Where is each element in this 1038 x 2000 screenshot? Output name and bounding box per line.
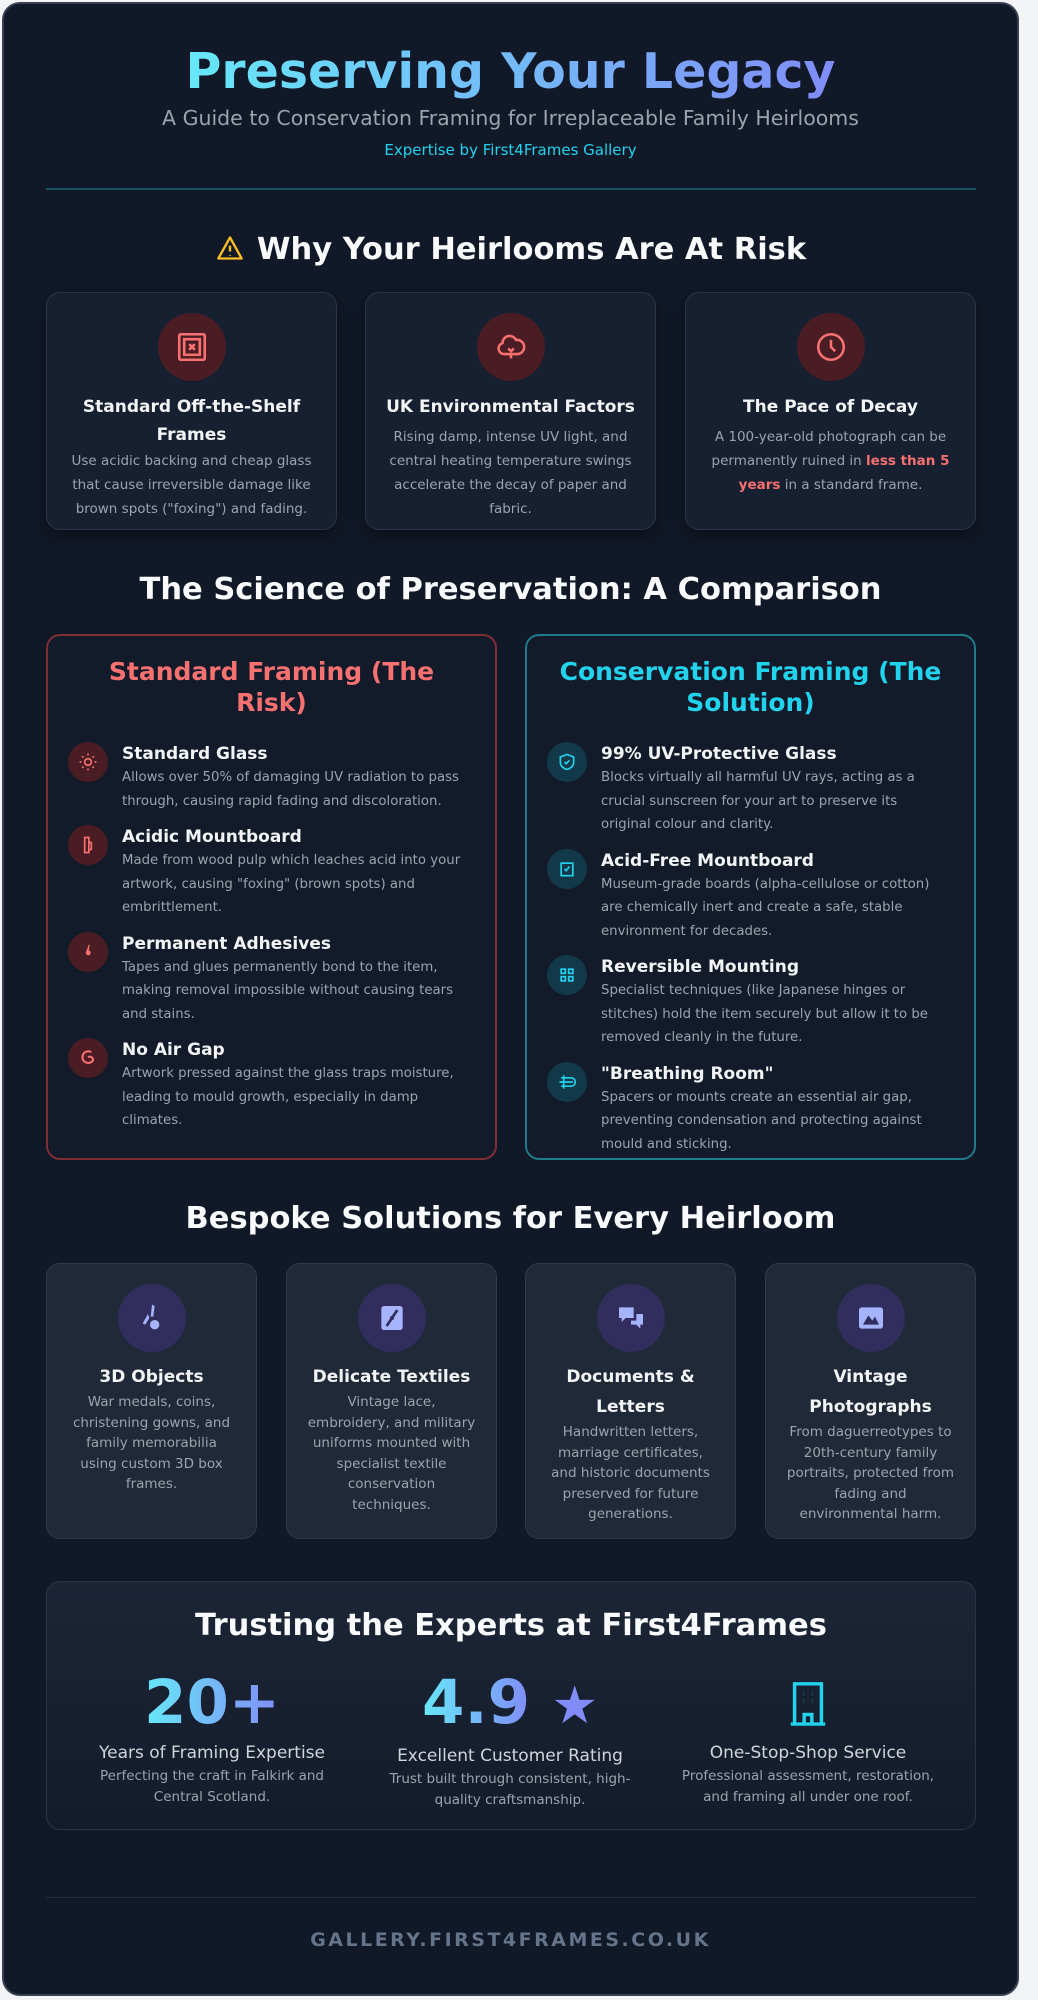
- card: textiles: Delicate Textiles: [313, 1367, 470, 1387]
- title: Preserving Your Legacy: [186, 43, 835, 100]
- item: no air gap: No Air Gap: [122, 1040, 225, 1060]
- item: acidic mountboard: [68, 825, 460, 915]
- panel: trusting the experts: [46, 1581, 976, 1830]
- stat: one-stop-shop: [682, 1682, 934, 1805]
- item: reversible: [547, 955, 928, 1045]
- stat: rating: Excellent Customer Rating: [397, 1746, 623, 1766]
- stat: rating: quality craftsmanship.: [435, 1792, 585, 1808]
- card: photographs: Vintage Photographs: [809, 1367, 932, 1417]
- card: textiles: Vintage lace,: [347, 1394, 436, 1410]
- heading: science: The Science of Preservation: A Comparison: [140, 572, 881, 607]
- item: UV glass: 99% UV-Protective Glass: [601, 744, 837, 764]
- icon: building: [790, 1682, 826, 1726]
- card: pace of decay: A 100-year-old photograph can be permanently ruined in less than 5 years in a standard frame.: [712, 429, 949, 493]
- panel: standard framing: Standard Framing (The: [109, 657, 434, 686]
- icon: frame: [158, 313, 226, 381]
- item: breathing room: [547, 1062, 922, 1152]
- stat: one-stop-shop: Professional assessment, restoration, and framing all under one roof.: [682, 1768, 934, 1805]
- stat: years: 20+: [144, 1667, 280, 1738]
- panel: standard framing: [46, 634, 497, 1160]
- item: breathing room: "Breathing Room": [601, 1064, 773, 1084]
- card: documents: Documents & Letters: [566, 1367, 695, 1417]
- icon: clock: [796, 313, 864, 381]
- item: acid-free: Acid-Free Mountboard: [601, 850, 814, 870]
- item: no air gap: Artwork pressed against the glass traps moisture, leading to mould growth, especially in damp climates.: [122, 1066, 454, 1128]
- card: documents: Handwritten letters, marriage certificates, and historic documents preserved for future generations.: [551, 1424, 710, 1522]
- heading: why at risk: Why Your Heirlooms Are At Risk: [257, 232, 806, 267]
- card: pace of decay: The Pace of Decay: [743, 397, 918, 417]
- expertise line: Expertise by First4Frames Gallery: [384, 141, 637, 159]
- card: textiles: [286, 1263, 497, 1539]
- card: off-the-shelf frames: [46, 292, 337, 530]
- card: photographs: From daguerreotypes to 20th-century family portraits, protected from fading and environmental harm.: [787, 1424, 954, 1522]
- panel: conservation framing: Conservation Framing (The: [560, 657, 941, 686]
- card: UK environment: [365, 292, 656, 530]
- card: pace of decay: [685, 292, 976, 530]
- stat: years: Years of Framing Expertise: [99, 1743, 325, 1763]
- item: reversible: Specialist techniques (like Japanese hinges or stitches) hold the item securely but allow it to be removed cleanly in the future.: [601, 983, 928, 1045]
- stat: rating: Trust built through consistent, high-: [390, 1771, 630, 1787]
- item: acidic mountboard: Made from wood pulp which leaches acid into your artwork, causing "foxing" (brown spots) and embrittlement.: [122, 853, 460, 915]
- stat: rating: [389, 1667, 630, 1808]
- item: adhesives: Tapes and glues permanently bond to the item, making removal impossible without causing tears and stains.: [122, 960, 453, 1022]
- card: 3D objects: War medals, coins, christening gowns, and family memorabilia using custom 3D box frames.: [73, 1394, 230, 1492]
- item: acidic mountboard: Acidic Mountboard: [122, 827, 302, 847]
- item: no air gap: [68, 1038, 454, 1128]
- card: 3D objects: [46, 1263, 257, 1539]
- icon: cloud: [476, 313, 544, 381]
- card: off-the-shelf frames: Use acidic backing and cheap glass that cause irreversible damage like brown spots ("foxing") and fading.: [71, 453, 312, 517]
- stat: years: Perfecting the craft in Falkirk and Central Scotland.: [100, 1768, 324, 1805]
- item: adhesives: Permanent Adhesives: [122, 934, 331, 954]
- card: textiles: embroidery, and military uniforms mounted with specialist textile conservation techniques.: [308, 1414, 475, 1512]
- item: acid-free: [547, 849, 929, 938]
- stat: years: [99, 1667, 325, 1805]
- card: off-the-shelf frames: Standard Off-the-Shelf Frames: [83, 397, 300, 445]
- footer url: GALLERY.FIRST4FRAMES.CO.UK: [310, 1929, 711, 1951]
- item: reversible: Reversible Mounting: [601, 957, 799, 977]
- panel: conservation framing: [525, 634, 976, 1160]
- item: adhesives: [68, 932, 453, 1022]
- item: UV glass: [547, 742, 915, 832]
- risk cards: [46, 292, 976, 534]
- panel: conservation framing: Solution): [686, 688, 815, 717]
- icon: picture: [836, 1284, 904, 1352]
- subtitle: A Guide to Conservation Framing for Irreplaceable Family Heirlooms: [162, 106, 859, 130]
- card: documents: [525, 1263, 736, 1539]
- card: UK environment: UK Environmental Factors: [386, 397, 635, 417]
- item: standard glass: [68, 742, 459, 808]
- heading: bespoke: Bespoke Solutions for Every Heirloom: [186, 1201, 835, 1236]
- card: photographs: [765, 1263, 976, 1539]
- card: UK environment: Rising damp, intense UV light, and central heating temperature swings accelerate the decay of paper and fabric.: [389, 429, 632, 517]
- card: 3D objects: 3D Objects: [99, 1367, 204, 1387]
- icon: medal: [118, 1284, 186, 1352]
- stat: rating: 4.9 ★: [422, 1667, 598, 1738]
- item: standard glass: Allows over 50% of damaging UV radiation to pass through, causing rapid fading and discoloration.: [122, 770, 459, 808]
- stat: one-stop-shop: One-Stop-Shop Service: [710, 1743, 906, 1763]
- heading: trust: Trusting the Experts at First4Frames: [195, 1608, 827, 1643]
- item: acid-free: Museum-grade boards (alpha-cellulose or cotton) are chemically inert and create a safe, stable environment for decades.: [601, 876, 929, 938]
- bespoke cards: [46, 1263, 976, 1539]
- icon: chat: [596, 1284, 664, 1352]
- icon: needle: [358, 1284, 426, 1352]
- item: breathing room: Spacers or mounts create an essential air gap, preventing condensation and protecting against mould and sticking.: [601, 1090, 922, 1152]
- item: standard glass: Standard Glass: [122, 744, 268, 764]
- panel: standard framing: Risk): [236, 688, 307, 717]
- item: UV glass: Blocks virtually all harmful UV rays, acting as a crucial sunscreen for your art to preserve its original colour and clarity.: [601, 770, 915, 832]
